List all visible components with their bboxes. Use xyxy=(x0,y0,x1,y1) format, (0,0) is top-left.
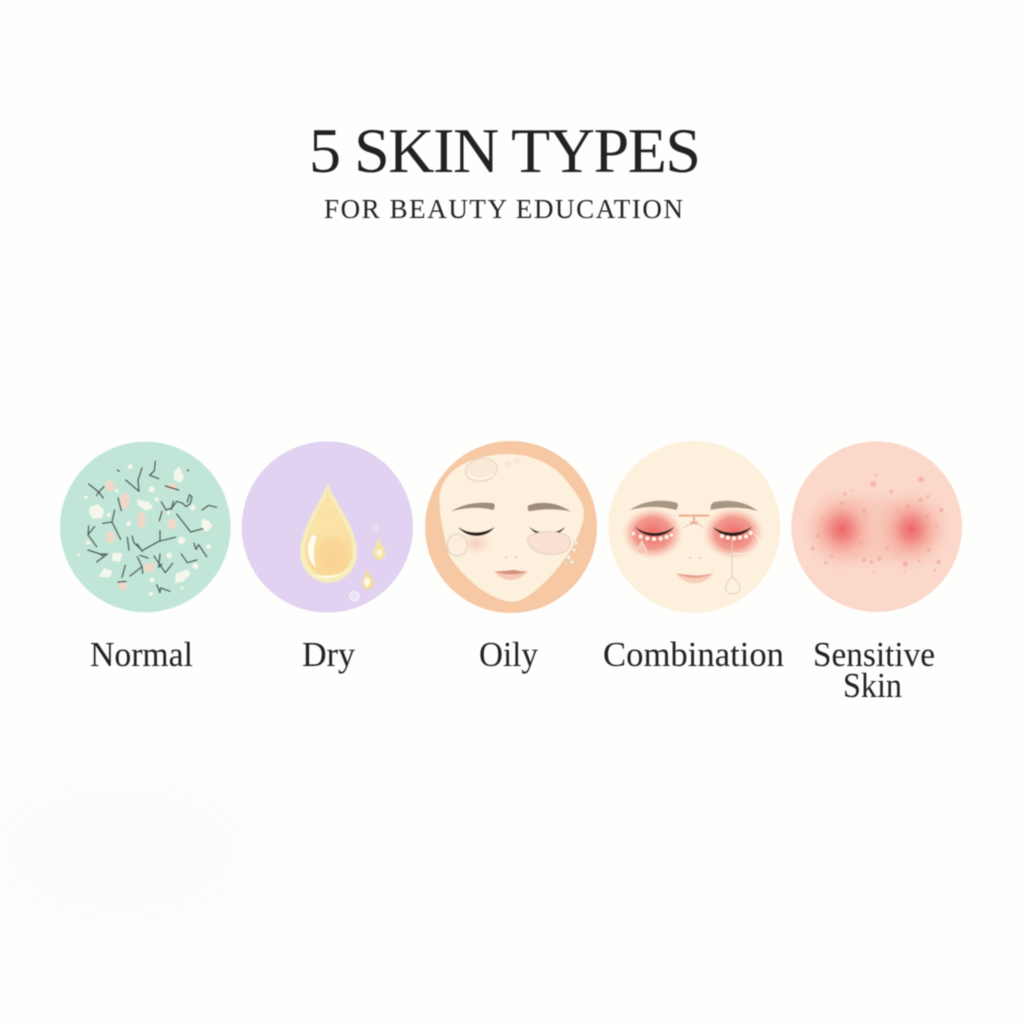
label: combination: Combination xyxy=(603,635,784,674)
label: oily: Oily xyxy=(479,635,538,674)
panel: normal skin xyxy=(60,442,231,674)
lips xyxy=(494,570,528,580)
T-zone mark xyxy=(679,516,709,523)
panel: sensitive skin xyxy=(791,441,962,705)
icon: oily skin face xyxy=(425,441,597,613)
panel: dry skin xyxy=(242,441,413,674)
panel: combination skin xyxy=(603,441,784,674)
oil bubbles xyxy=(463,456,499,484)
panel: oily skin xyxy=(425,441,597,674)
nose xyxy=(505,556,507,558)
title: 5 SKIN TYPES xyxy=(309,115,701,186)
icon: normal skin circle xyxy=(60,442,231,612)
eyes xyxy=(459,528,494,536)
icon: dry skin circle with oil drops xyxy=(242,441,413,613)
label: dry: Dry xyxy=(302,635,355,674)
icon: combination skin face xyxy=(608,441,780,613)
label: sensitive skin: Sensitive xyxy=(813,635,935,674)
eyebrows xyxy=(451,503,495,511)
subtitle: FOR BEAUTY EDUCATION xyxy=(324,194,683,224)
icon: sensitive skin circle with redness xyxy=(791,441,962,612)
panel: sensitive skin: Skin xyxy=(843,666,902,705)
label: normal: Normal xyxy=(90,635,193,674)
